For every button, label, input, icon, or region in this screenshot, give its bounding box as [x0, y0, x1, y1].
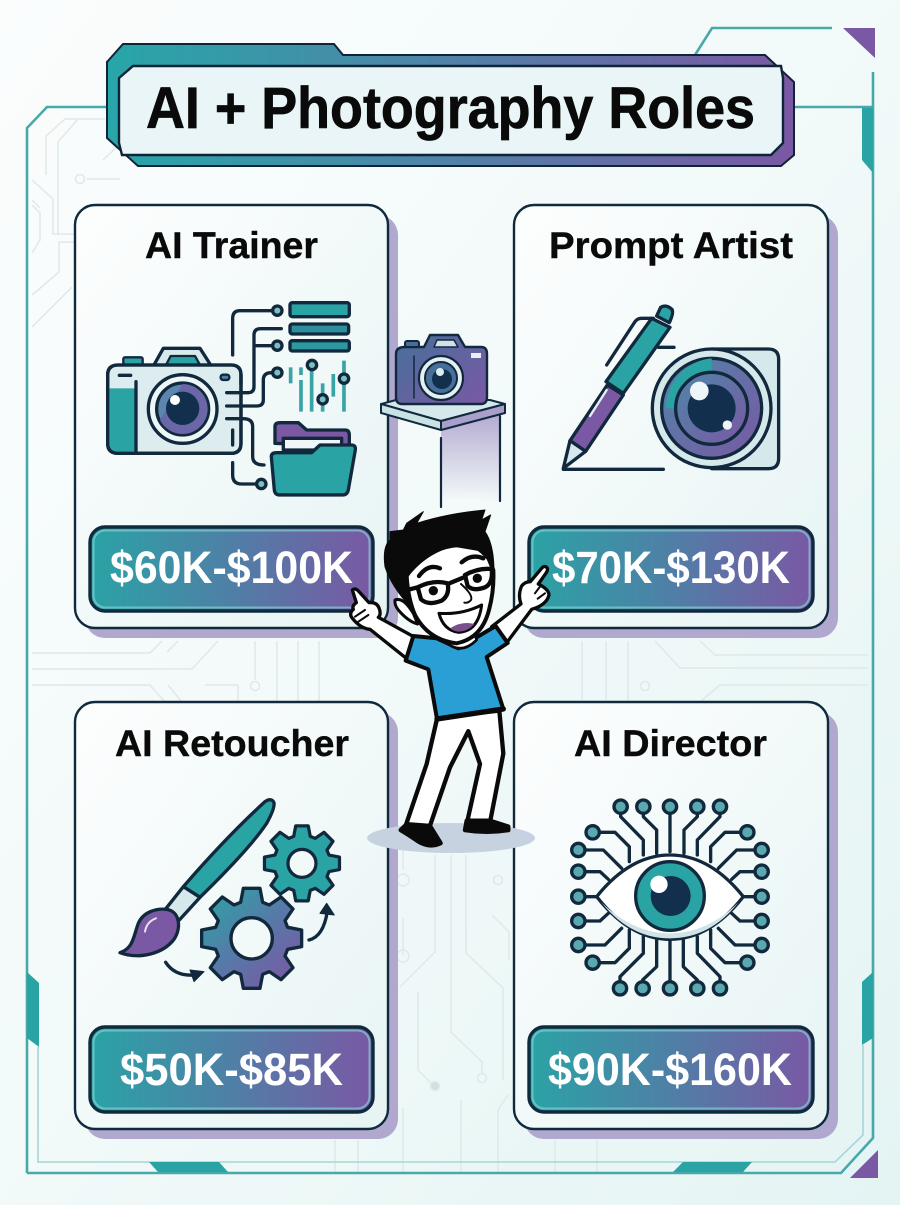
- right arm and hand: [492, 567, 549, 645]
- neck: [443, 635, 477, 648]
- icon: pen and lens: [563, 306, 779, 469]
- glasses: [407, 569, 492, 603]
- salary pill: AI Retoucher: [90, 1027, 373, 1112]
- salary pill: AI Trainer: $60K-$100K: [110, 542, 353, 593]
- heading: AI Retoucher: AI Retoucher: [115, 723, 349, 764]
- icon: circuit eye: [572, 800, 768, 995]
- title banner: [107, 44, 794, 166]
- heading: Prompt Artist: Prompt Artist: [549, 225, 793, 266]
- mouth: [439, 605, 482, 632]
- panel: Prompt Artist: [514, 205, 838, 638]
- ear: [395, 599, 418, 624]
- panel: AI Director: [514, 702, 838, 1139]
- icon: camera with data connections: [108, 303, 355, 495]
- salary pill: AI Director: $90K-$160K: [548, 1044, 792, 1095]
- salary pill: Prompt Artist: [529, 527, 813, 611]
- panel: AI Retoucher: [75, 702, 398, 1139]
- heading: AI Director: AI Director: [574, 723, 767, 764]
- panel: AI Trainer: [75, 205, 398, 638]
- eyebrows: [419, 567, 440, 576]
- heading: AI Trainer: AI Trainer: [145, 225, 318, 266]
- upper body and head: [351, 510, 549, 719]
- character: cheering man pointing at salaries: [351, 510, 549, 853]
- face: [407, 543, 493, 643]
- salary pill: AI Retoucher: $50K-$85K: [120, 1044, 343, 1095]
- icon: camera on pedestal: [381, 335, 505, 507]
- salary pill: Prompt Artist: $70K-$130K: [552, 542, 790, 593]
- hair: [384, 510, 494, 605]
- floor shadow: [367, 823, 535, 853]
- salary pill: AI Trainer: [90, 527, 373, 611]
- title text: AI + Photography Roles: [146, 76, 755, 141]
- shirt: [406, 626, 508, 719]
- lower body: [401, 711, 508, 845]
- icon: brush and gears: [120, 800, 339, 988]
- left arm and hand: [351, 589, 417, 660]
- salary pill: AI Director: [529, 1027, 813, 1112]
